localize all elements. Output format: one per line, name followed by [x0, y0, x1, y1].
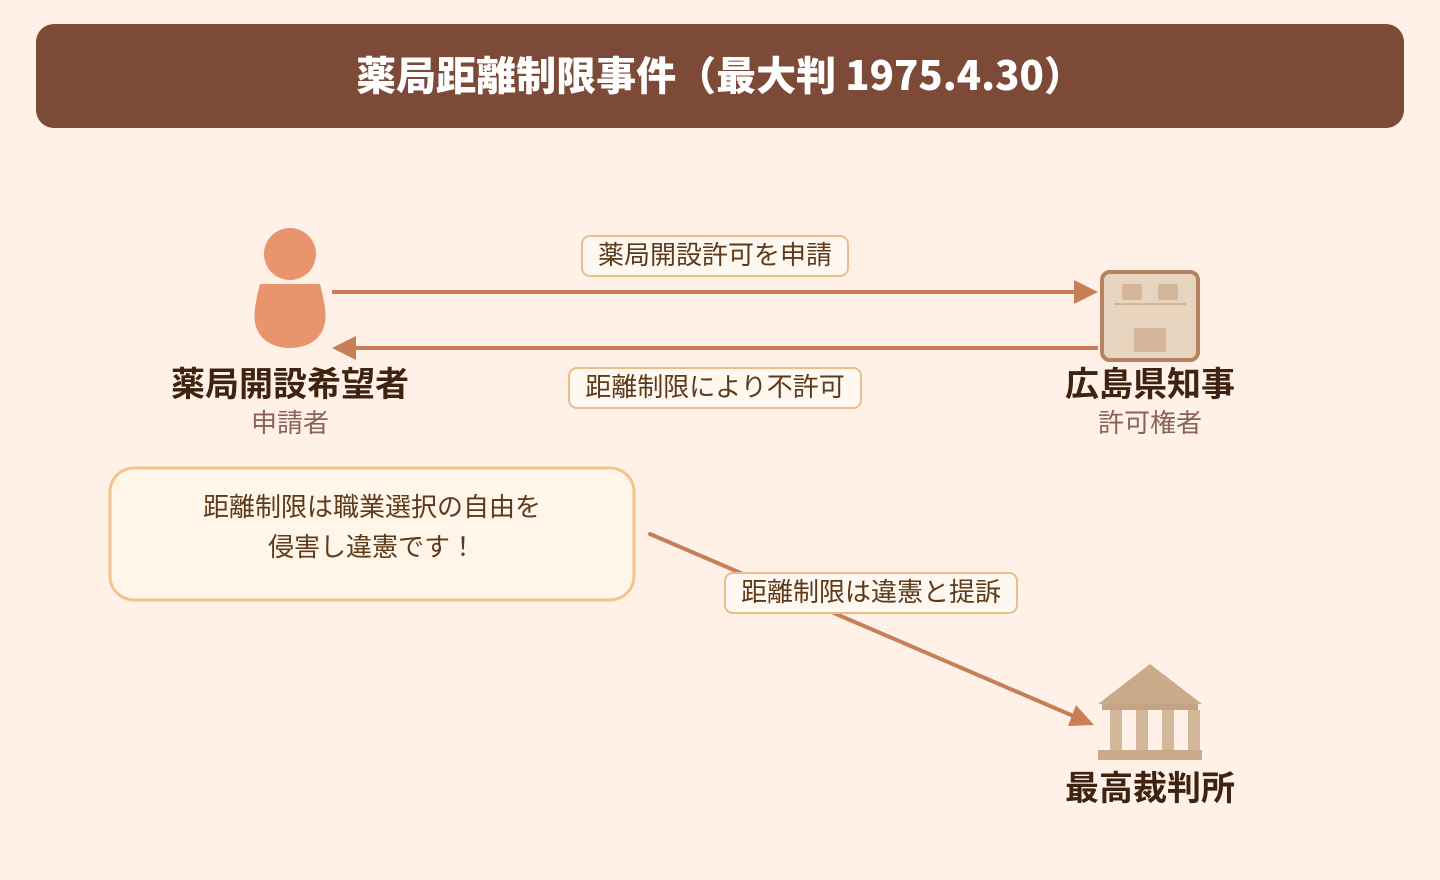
icon: prefectural office: [1102, 272, 1198, 360]
icon: supreme court: [1098, 664, 1202, 760]
title banner: [36, 24, 1404, 128]
arrow: lawsuit: [650, 534, 1094, 726]
callout: applicant claim: [108, 466, 636, 602]
callout: applicant claim: 侵害し違憲です！: [268, 527, 476, 564]
title: 薬局距離制限事件（最大判 1975.4.30）: [356, 44, 1084, 102]
label: application: 薬局開設許可を申請: [598, 235, 832, 272]
supreme court name: 最高裁判所: [1065, 761, 1235, 810]
label: lawsuit: 距離制限は違憲と提訴: [741, 572, 1001, 609]
applicant name: 薬局開設希望者: [171, 357, 409, 406]
applicant role: 申請者: [251, 403, 329, 440]
arrow: application: [332, 280, 1098, 304]
callout: applicant claim: 距離制限は職業選択の自由を: [203, 487, 541, 524]
label: denial: 距離制限により不許可: [585, 367, 845, 404]
arrow: denial: [332, 336, 1098, 360]
governor name: 広島県知事: [1065, 357, 1235, 406]
governor role: 許可権者: [1098, 403, 1202, 440]
icon: applicant person: [254, 228, 326, 348]
